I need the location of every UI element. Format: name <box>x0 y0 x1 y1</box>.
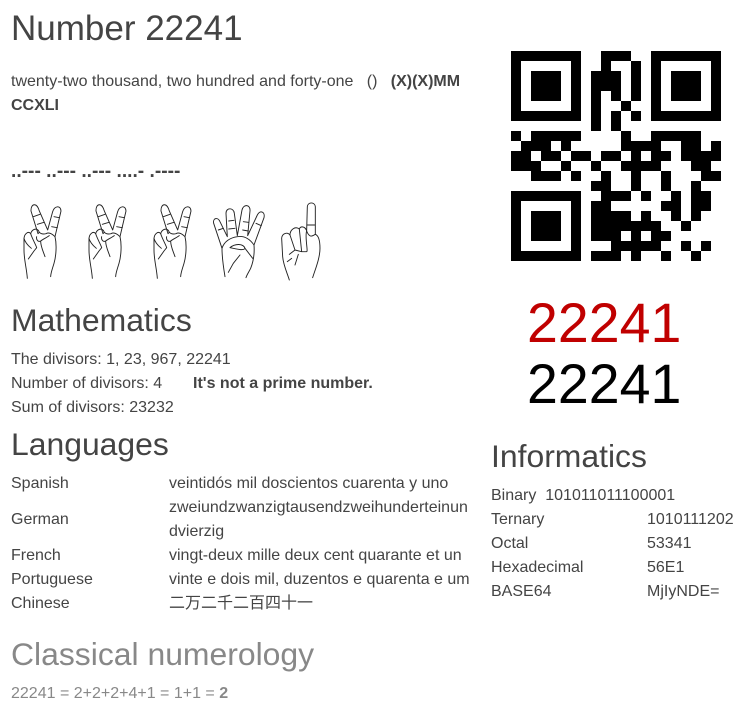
heading: informatics: Informatics <box>491 438 647 474</box>
languages table: veintidós mil doscientos cuarenta y uno <box>169 475 448 492</box>
large number in black: 22241 <box>527 353 681 415</box>
languages table: Portuguese <box>11 571 93 588</box>
languages table: vingt-deux mille deux cent quarante et un <box>169 547 462 564</box>
icon: hand two <box>154 205 191 278</box>
heading: languages: Languages <box>11 426 169 462</box>
heading: classical numerology: Classical numerology <box>11 636 314 672</box>
languages table: French <box>11 547 61 564</box>
languages table: Chinese <box>11 595 70 612</box>
number in words and roman numerals: twenty-two thousand, two hundred and forty-one () (X)(X)MM CCXLI <box>11 73 460 114</box>
icon: hand one <box>282 203 320 280</box>
informatics table: Hexadecimal <box>491 559 583 576</box>
informatics table: 53341 <box>647 535 692 552</box>
icon: hand two <box>24 205 61 278</box>
mathematics facts: Sum of divisors: 23232 <box>11 399 174 416</box>
informatics table: BASE64 <box>491 583 551 600</box>
informatics table: Binary 101011011100001 <box>491 487 675 504</box>
languages table: 二万二千二百四十一 <box>169 595 313 612</box>
mathematics facts: The divisors: 1, 23, 967, 22241 <box>11 351 231 368</box>
heading: mathematics: Mathematics <box>11 302 192 338</box>
morse code: ..--- ..--- ..--- ....- .---- <box>11 161 180 182</box>
languages table: Spanish <box>11 475 69 492</box>
mathematics facts <box>11 351 373 416</box>
informatics table: 1010111202 <box>647 511 734 528</box>
languages table: vinte e dois mil, duzentos e quarenta e um <box>169 571 470 588</box>
icon: hand two <box>89 205 126 278</box>
title: Number 22241 <box>11 9 243 48</box>
informatics table: Ternary <box>491 511 544 528</box>
informatics table: MjIyNDE= <box>647 583 719 600</box>
mathematics facts: Number of divisors: 4 <box>11 375 162 392</box>
languages table <box>11 475 470 612</box>
languages table: zweiundzwanzigtausendzweihunderteinun dvierzig <box>169 499 468 540</box>
icon: hand four <box>214 206 264 278</box>
QR code <box>511 51 721 261</box>
mathematics facts: It's not a prime number. <box>193 375 373 392</box>
informatics table <box>491 487 734 600</box>
informatics table: Octal <box>491 535 528 552</box>
informatics table: 56E1 <box>647 559 684 576</box>
large number in red: 22241 <box>527 292 681 354</box>
numerology sum: 22241 = 2+2+2+4+1 = 1+1 = 2 <box>11 685 228 702</box>
languages table: German <box>11 511 69 528</box>
icon: sign language hands <box>24 202 320 280</box>
